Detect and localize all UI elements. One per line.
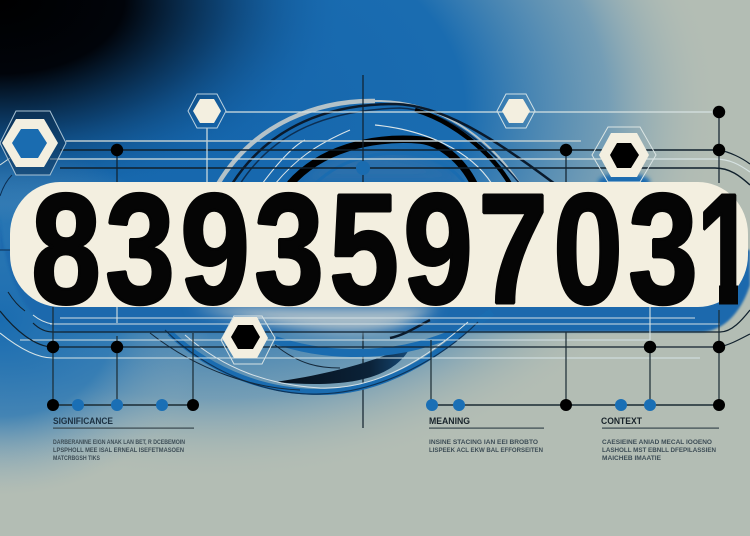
hexagon: black centre bottom: [221, 316, 275, 364]
connector lines below the number: [0, 175, 750, 405]
text block: significance: LPSPHOLL MEE ISAL ERNEAL ISEFETMASOEN: [53, 448, 184, 454]
text block: context: LASHOLL MST EBNLL DFEPILASSIEN: [602, 448, 716, 454]
timeline: significance: [47, 399, 199, 411]
text block: context: CONTEXT: [601, 416, 642, 426]
text block: context: MAICHEB IMAATIE: [602, 456, 661, 462]
text block: context: [601, 416, 719, 462]
text block: context: CAESIEINE ANIAD MECAL IOOENO: [602, 440, 712, 446]
hexagon: small cream left: [188, 94, 226, 128]
hexagon: large black right: [592, 127, 656, 182]
text block: meaning: [429, 416, 544, 454]
node dots above the number: [111, 106, 725, 175]
text block: significance: DARBERANINE EIGN ANAK LAN BET, R DCEBEMOIN: [53, 440, 185, 446]
blue band below the number: [0, 215, 750, 332]
text block: significance: [53, 416, 194, 462]
big number: 839359703: [31, 162, 698, 337]
hexagon: small cream right: [497, 94, 535, 128]
text block: significance: MATCRBGSH TIKS: [53, 456, 100, 462]
hexagon: large blue: [0, 111, 66, 175]
timeline: meaning and context: [426, 399, 725, 411]
text block: meaning: MEANING: [429, 416, 470, 426]
node dots below the number: [47, 341, 725, 353]
swoosh ribbons below the number: [150, 312, 492, 394]
swirl above the number: [218, 101, 555, 184]
text block: meaning: INSINE STACING IAN EEI BROBTO: [429, 440, 538, 446]
text block: significance: SIGNIFICANCE: [53, 416, 113, 426]
connector lines above the number: [0, 75, 750, 428]
blue glow under black hexagon: [598, 173, 650, 191]
text block: meaning: LISPEEK ACL EKW BAL EFFORSEITEN: [429, 448, 543, 454]
number panel: [10, 182, 748, 307]
